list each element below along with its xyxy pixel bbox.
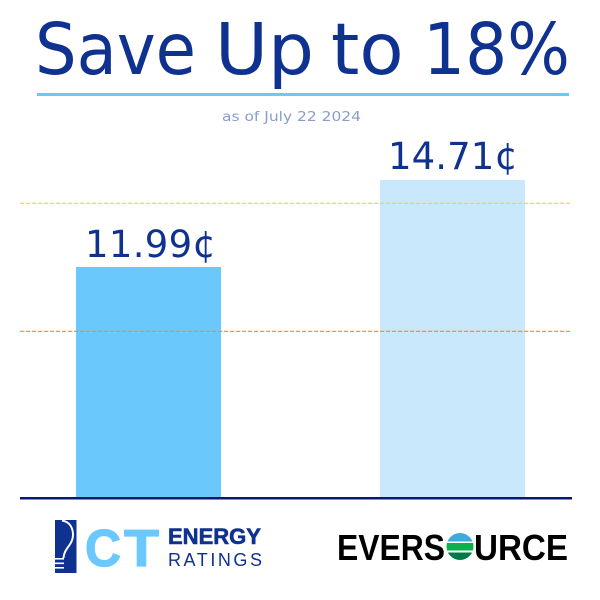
logo: Eversource [339, 533, 567, 560]
logo: CT Energy Ratings [55, 520, 262, 578]
title: 18% [423, 8, 570, 91]
logo text: RATINGS: RATINGS [168, 550, 262, 570]
chart baseline [20, 497, 572, 500]
bar: CT Energy Ratings [76, 267, 221, 497]
logo letter: C: C [85, 520, 121, 578]
title [35, 8, 570, 91]
title: to [331, 8, 404, 91]
value label: 11.99 cents: 11.99¢ [85, 223, 216, 266]
title underline [37, 93, 569, 96]
title: Up [215, 8, 314, 91]
icon: striped O [446, 533, 474, 560]
logo text: EVERS: EVERS [337, 527, 445, 568]
logo letter: T: T [124, 520, 159, 578]
logo text: URCE: URCE [474, 527, 568, 568]
value label: 14.71 cents: 14.71¢ [388, 135, 518, 178]
bar: Eversource [380, 180, 525, 497]
title: Save [35, 8, 196, 91]
subtitle: date: as of July 22 2024 [222, 110, 361, 125]
icon: light bulb [55, 520, 76, 573]
logo text: ENERGY: ENERGY [168, 524, 261, 549]
